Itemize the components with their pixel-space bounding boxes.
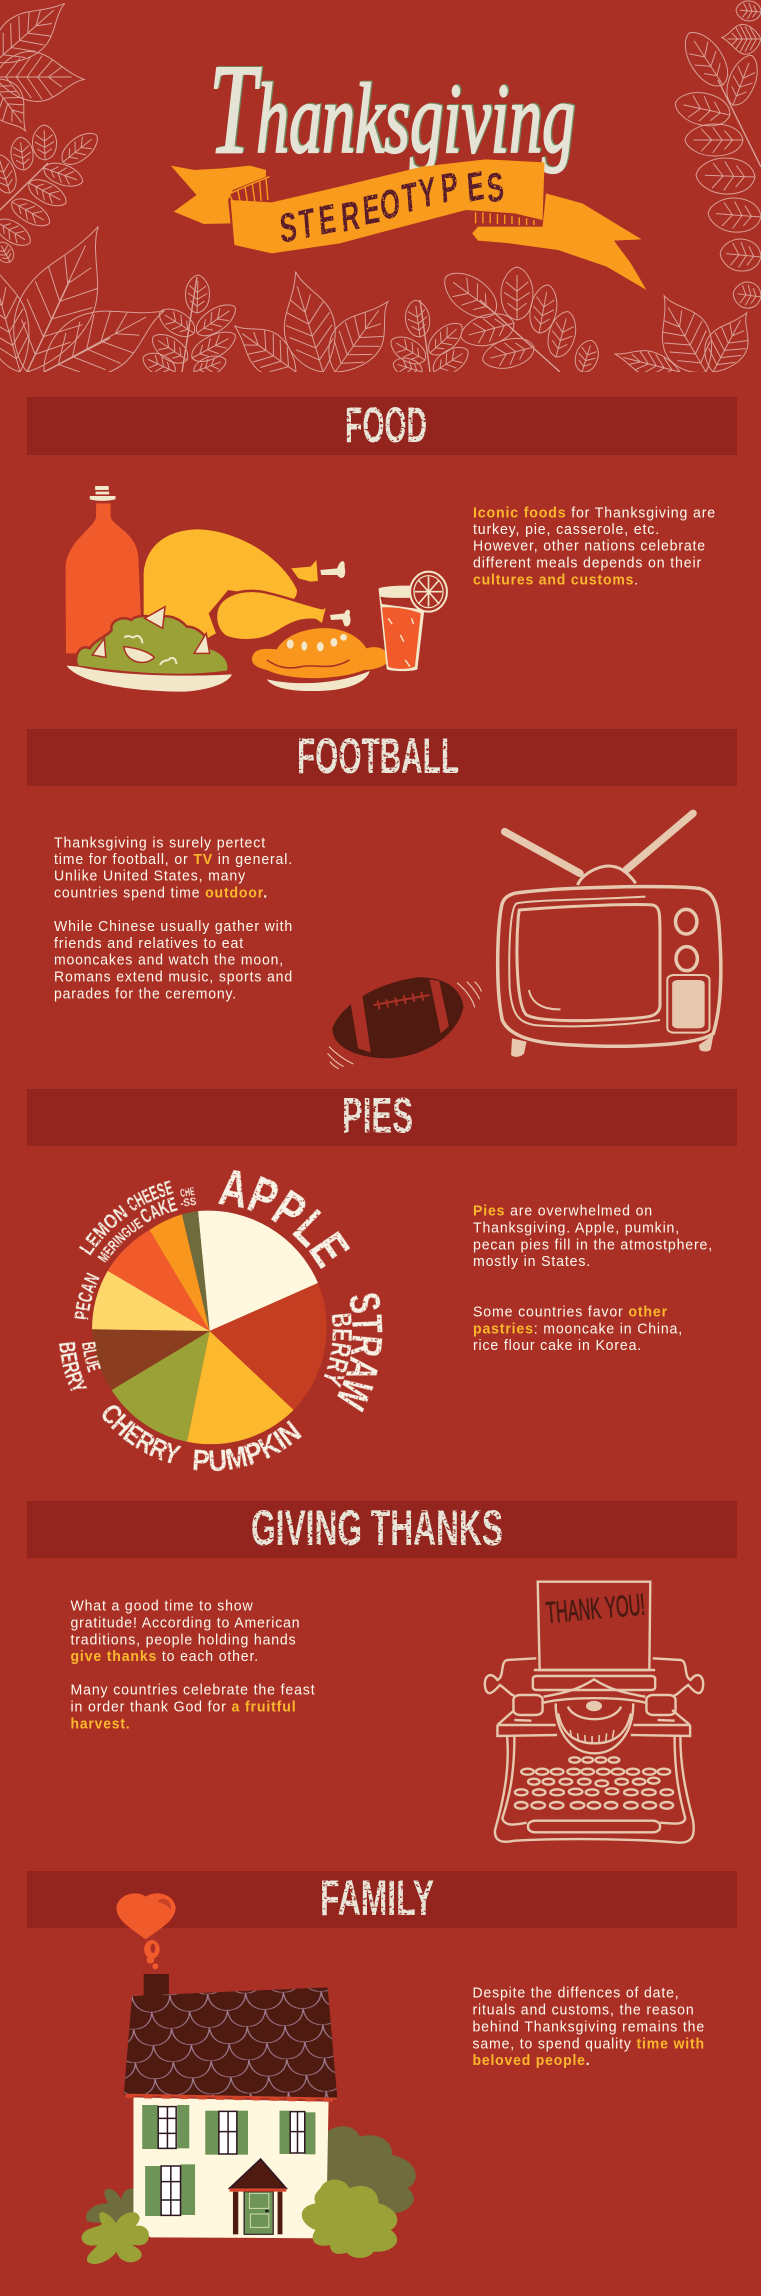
banner text: STEREOTYPES: STEREOTYPES — [278, 163, 506, 253]
text: football: time for football, or TV in general. — [54, 851, 293, 868]
section header: FOOD — [27, 397, 737, 455]
text: giving thanks: give thanks to each other. — [70, 1648, 259, 1665]
text: family: beloved people. — [472, 2052, 590, 2069]
section header: FAMILY — [27, 1870, 737, 1928]
pie chart labels: APPLE — [218, 1170, 350, 1269]
text: giving thanks: in order thank God for a fruitful — [70, 1699, 296, 1716]
pie chart labels: MERINGUE — [97, 1218, 144, 1263]
section header: FOOD: FOOD — [345, 397, 427, 453]
pie chart: pie preferences — [92, 1211, 327, 1444]
decorative leaf border — [0, 0, 761, 400]
text: football: mooncakes and watch the moon, — [54, 952, 284, 969]
illustration: house with heart smoke — [82, 1893, 416, 2264]
pie chart labels: PUMPKIN — [193, 1420, 302, 1472]
panel: giving thanks — [27, 1500, 737, 1843]
pie chart labels: CHEESE — [126, 1180, 174, 1211]
text: football: friends and relatives to eat — [54, 935, 244, 952]
pie chart labels: BERRY — [324, 1313, 352, 1388]
section header: PIES — [27, 1088, 737, 1146]
text: food: turkey, pie, casserole, etc. — [473, 521, 660, 538]
banner: orange ribbon — [171, 159, 646, 290]
panel: family — [27, 1870, 737, 2264]
icon: turkey — [144, 529, 351, 640]
pie chart labels: -SS — [180, 1197, 196, 1206]
text: football: Thanksgiving is surely pertect — [54, 834, 266, 851]
text: football: countries spend time outdoor. — [54, 884, 268, 901]
section header: FOOTBALL — [27, 728, 737, 786]
icon: heart smoke — [116, 1893, 176, 1969]
text: family — [472, 1985, 705, 2069]
text: pies: Thanksgiving. Apple, pumkin, — [473, 1220, 680, 1237]
panel: pies — [27, 1088, 737, 1472]
text: pies: pastries: mooncake in China, — [473, 1320, 683, 1337]
pie chart labels — [58, 1170, 383, 1472]
title: Thanksgiving: Thanksgiving — [209, 38, 575, 180]
text: giving thanks: traditions, people holding hands — [70, 1631, 296, 1648]
text: pies: rice flour cake in Korea. — [473, 1337, 642, 1354]
text: food — [473, 504, 716, 588]
pie chart labels: STRAW — [337, 1293, 383, 1413]
text: giving thanks: Many countries celebrate the feast — [70, 1682, 316, 1699]
porch and door — [230, 2159, 286, 2234]
section header: FOOTBALL: FOOTBALL — [297, 728, 459, 784]
text: football: While Chinese usually gather with — [54, 918, 293, 935]
text: pies: Pies are overwhelmed on — [473, 1203, 653, 1220]
windows — [142, 2105, 315, 2216]
pie chart labels: CHE — [180, 1187, 195, 1197]
pie chart labels: BERRY — [58, 1342, 88, 1392]
pie chart labels: CHERRY — [102, 1405, 182, 1464]
text: giving thanks — [70, 1598, 316, 1732]
text: pies: mostly in States. — [473, 1253, 591, 1270]
pie chart labels: PECAN — [74, 1272, 100, 1320]
paper text: THANK YOU!: THANK YOU! — [545, 1588, 646, 1630]
icon: typewriter — [485, 1582, 703, 1843]
text: food: However, other nations celebrate — [473, 538, 706, 555]
text: family: same, to spend quality time with — [472, 2035, 705, 2052]
icon: house — [124, 1974, 337, 2238]
icon: salad plate — [66, 607, 232, 692]
text: pies — [473, 1203, 713, 1354]
pie chart labels: BLUE — [82, 1342, 102, 1373]
text: family: rituals and customs, the reason — [472, 2002, 694, 2019]
header: title and leaves — [0, 0, 761, 400]
text: football: parades for the ceremony. — [54, 985, 237, 1002]
text: food: different meals depends on their — [473, 554, 702, 571]
icon: drink glass — [379, 572, 447, 671]
text: football: Unlike United States, many — [54, 868, 246, 885]
icon: football — [328, 977, 481, 1069]
icon: back bushes — [86, 2126, 416, 2227]
section header: GIVING THANKS: GIVING THANKS — [251, 1500, 503, 1556]
illustration: Thanksgiving meal — [66, 486, 447, 692]
pie chart labels: CAKE — [140, 1196, 178, 1222]
pie chart labels: LEMON — [78, 1204, 128, 1256]
text: football: Romans extend music, sports and — [54, 968, 293, 985]
section header: PIES: PIES — [342, 1088, 413, 1144]
text: giving thanks: harvest. — [70, 1715, 130, 1732]
section header: FAMILY: FAMILY — [320, 1870, 434, 1926]
icon: pie — [252, 628, 388, 691]
text: food: Iconic foods for Thanksgiving are — [473, 504, 716, 521]
text: football — [54, 834, 293, 1002]
panel: football — [27, 728, 737, 1069]
icon: bottle — [66, 486, 141, 653]
text: food: cultures and customs. — [473, 571, 639, 588]
text: family: Despite the diffences of date, — [472, 1985, 680, 2002]
text: pies: pecan pies fill in the atmostphere, — [473, 1236, 713, 1253]
text: giving thanks: What a good time to show — [70, 1598, 254, 1615]
panel: food — [27, 397, 737, 692]
text: giving thanks: gratitude! According to American — [70, 1614, 300, 1631]
icon: front bushes — [82, 2180, 397, 2264]
text: pies: Some countries favor other — [473, 1303, 668, 1320]
section header: GIVING THANKS — [27, 1500, 737, 1558]
icon: television — [498, 813, 721, 1057]
text: family: behind Thanksgiving remains the — [472, 2018, 705, 2035]
